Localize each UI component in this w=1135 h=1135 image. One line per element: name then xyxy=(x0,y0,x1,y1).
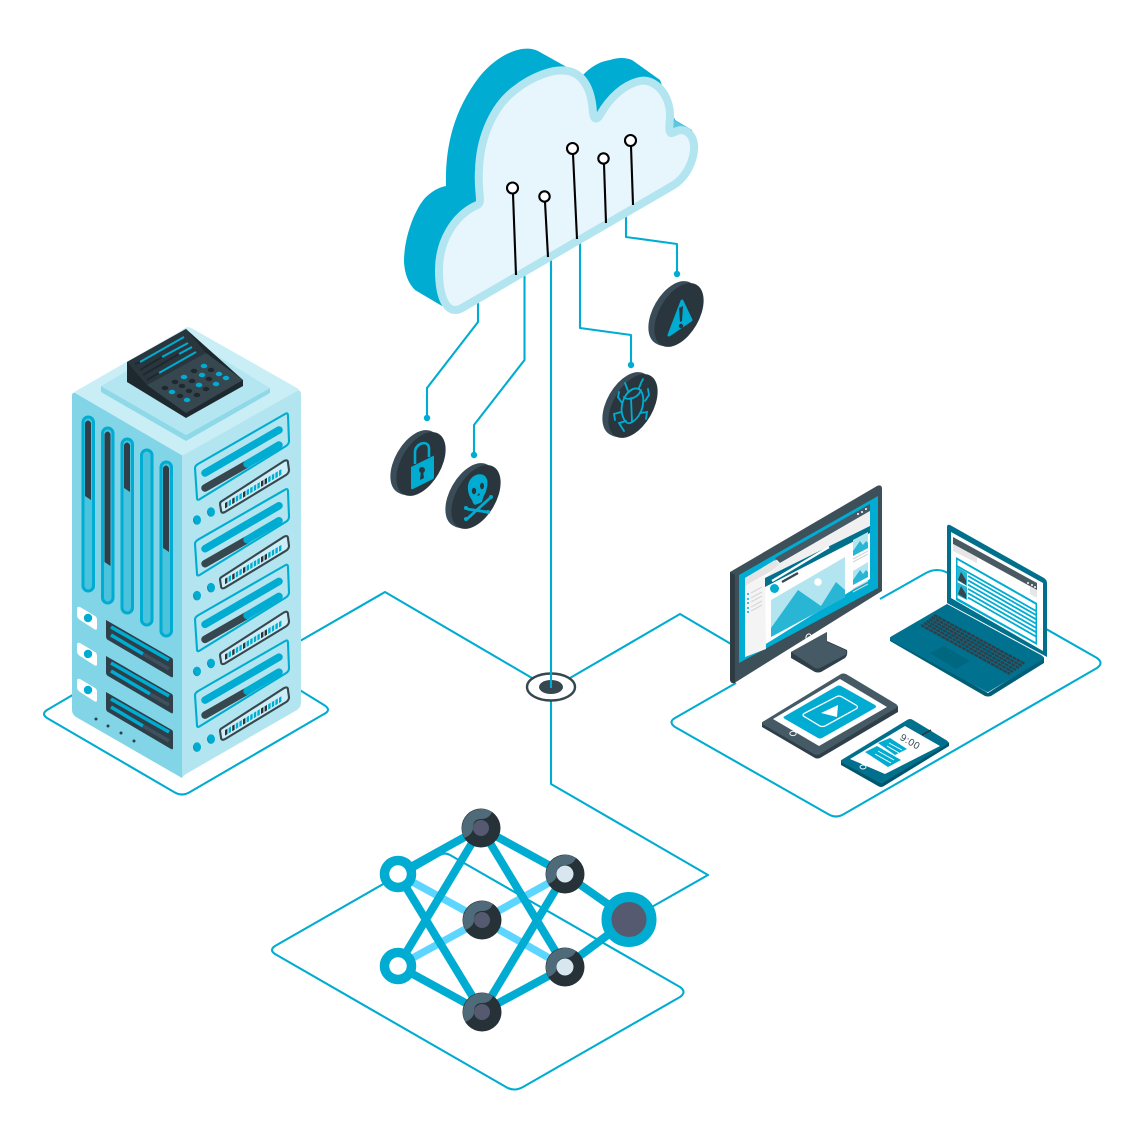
server top pad xyxy=(101,337,270,441)
tablet screen xyxy=(773,679,887,746)
icon: padlock coin xyxy=(380,422,456,504)
right node upper xyxy=(546,854,584,894)
laptop text lines xyxy=(968,576,1036,636)
dark connections xyxy=(398,828,629,1012)
browser header band xyxy=(765,526,870,587)
laptop touchpad xyxy=(930,646,970,669)
monitor bezel xyxy=(730,485,882,683)
phone home ring xyxy=(860,765,866,769)
hidden node middle xyxy=(462,900,502,940)
browser tab and title bar xyxy=(745,504,870,586)
laptop xyxy=(890,525,1047,696)
server rack units xyxy=(193,413,289,752)
hidden node top xyxy=(462,808,500,848)
line: devices to hub xyxy=(570,614,731,678)
smartphone xyxy=(841,719,949,787)
monitor screen xyxy=(745,507,870,657)
line: cloud to skull xyxy=(474,275,524,455)
neural network xyxy=(384,808,652,1032)
monitor stand xyxy=(791,632,847,672)
icon: warning coin xyxy=(638,273,714,355)
laptop base xyxy=(890,604,1044,696)
tablet xyxy=(762,674,898,758)
server status buttons xyxy=(77,607,97,702)
monitor screen frame xyxy=(739,496,878,663)
server vent dots xyxy=(94,718,136,742)
play icon xyxy=(821,705,838,717)
server drive panels xyxy=(106,620,173,749)
phone screen xyxy=(850,726,940,774)
cloud face xyxy=(439,70,694,310)
browser search bar xyxy=(772,547,829,581)
central hub with vertical line xyxy=(527,255,575,700)
slot level bars xyxy=(85,420,169,566)
platform: neural network xyxy=(272,854,684,1090)
server left face xyxy=(72,393,183,778)
laptop thumbnails xyxy=(957,567,967,600)
sidebar list xyxy=(747,587,762,613)
monitor logo xyxy=(805,633,812,641)
right node lower xyxy=(546,948,584,986)
profile xyxy=(770,573,798,593)
cloud xyxy=(404,49,694,310)
laptop browser bar xyxy=(953,537,1037,598)
monitor xyxy=(730,485,882,683)
line: hub to neural network xyxy=(551,700,708,908)
connector end dots xyxy=(424,271,680,458)
line: cloud to lock xyxy=(427,300,478,418)
tablet home ring xyxy=(790,731,796,736)
side thumbnails xyxy=(853,532,868,592)
server tower xyxy=(72,327,301,778)
icon: skull coin xyxy=(435,455,511,537)
server vertical slots xyxy=(83,417,172,636)
photo xyxy=(771,557,845,637)
connector lines and platforms xyxy=(44,215,1100,1090)
control panel keyboard xyxy=(127,329,243,418)
line: cloud to warning xyxy=(626,215,677,274)
phone notification cards xyxy=(865,738,907,767)
server top face xyxy=(73,327,300,458)
server right face xyxy=(182,391,301,778)
light connections xyxy=(398,874,565,967)
platform: server xyxy=(44,689,328,794)
phone speaker xyxy=(922,730,931,735)
output node xyxy=(606,897,652,942)
browser sidebar panel xyxy=(745,576,766,657)
cloud depth xyxy=(404,49,692,306)
tablet video card xyxy=(784,686,876,738)
laptop header rule xyxy=(957,566,1036,611)
cloud side highlight xyxy=(672,120,690,135)
cloud pins xyxy=(507,135,636,275)
icon: bug coin xyxy=(592,364,668,446)
laptop keyboard xyxy=(921,615,1025,674)
phone clock: 9:00 xyxy=(898,732,922,753)
platform: devices xyxy=(672,570,1100,816)
line: cloud to bug xyxy=(580,240,631,365)
laptop screen xyxy=(947,525,1047,657)
input nodes xyxy=(384,860,412,980)
laptop page frame xyxy=(956,557,1037,645)
line: server to hub xyxy=(300,592,532,678)
hidden node bottom xyxy=(462,992,502,1032)
